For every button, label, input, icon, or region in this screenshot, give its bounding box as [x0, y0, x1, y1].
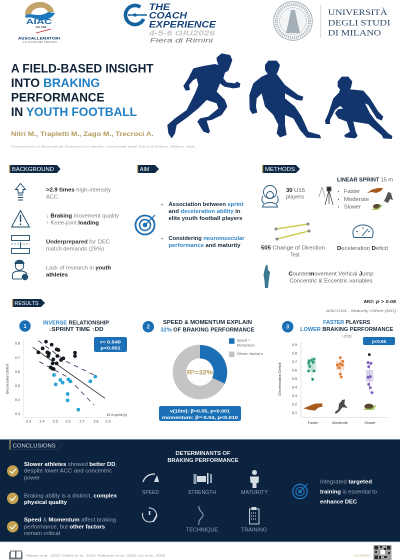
- legend: [229, 338, 263, 357]
- heading 1: [43, 320, 110, 333]
- determinants heading: BRAKING PERFORMANCE: [168, 458, 239, 464]
- y axis ticks: 0.7: [292, 360, 297, 364]
- label: maturity: MATURITY: [241, 490, 268, 496]
- title: INTO BRAKING: [11, 78, 100, 90]
- icon: speed: [143, 474, 159, 482]
- logo: Università degli Studi di Milano: DEGLI STUDI: [328, 17, 390, 27]
- text: 505 test: [261, 246, 325, 259]
- y axis ticks: [292, 343, 297, 415]
- text: ancova: ANCOVA - Maturity Offset (MO): [325, 309, 396, 313]
- icon: strength: [194, 473, 212, 484]
- aim text: [161, 202, 244, 249]
- panel: result 2: [143, 320, 263, 421]
- tag: conclusions: [10, 440, 62, 450]
- contact label: Contact:: [354, 554, 371, 558]
- icon: maturity: [250, 470, 259, 488]
- badge 3: 3: [286, 325, 289, 331]
- badge 2: 2: [147, 325, 150, 331]
- icon: timing gates: [319, 187, 333, 205]
- tag: aim: [137, 165, 159, 173]
- QR code: [374, 545, 392, 560]
- tag: background: [9, 165, 60, 173]
- icon: runner: [335, 399, 348, 414]
- x axis labels: Faster: [308, 421, 319, 425]
- illustration: three football player silhouettes: [167, 53, 392, 139]
- text: maturity offset: MO: p > 0.05: [364, 299, 397, 304]
- logo: The Coach Experience: EXPERIENCE: [149, 20, 217, 30]
- determinants icons: [142, 470, 268, 534]
- text 3: [24, 518, 116, 537]
- y axis ticks: 0.7: [15, 356, 20, 360]
- panel: result 3: [278, 320, 395, 425]
- x axis label: 15 m sprint (s): [107, 413, 127, 417]
- x axis ticks: 2.4: [40, 420, 44, 424]
- title: [11, 64, 154, 119]
- icon: cheetah: [303, 403, 322, 411]
- icon: cheetah: [367, 188, 383, 193]
- tag: results: RESULTS: [14, 301, 39, 307]
- donut chart: R²=32%: [187, 369, 213, 376]
- x axis ticks: 2.9: [106, 420, 110, 424]
- tag: results: [12, 299, 45, 307]
- training takeaway: enhance DEC: [320, 500, 357, 506]
- scatter plot: [23, 340, 110, 417]
- text 1: Slower athletes showed better DD,: [24, 462, 117, 468]
- text: lack of research: athletes: [46, 272, 68, 278]
- y axis ticks: 0.5: [15, 384, 20, 388]
- icon: gap: [11, 236, 30, 254]
- icon: gauge: [353, 225, 373, 238]
- training takeaway: training is essential to: [320, 490, 377, 496]
- text: 30 U15 players: [286, 188, 305, 200]
- references: Harper et al., 2020; Clarke et al., 2022; McBurnie et al., 2022; Lin et al., 2025: [26, 554, 165, 558]
- text 1: [24, 462, 117, 482]
- text: CMJ: Concentric & Eccentric variables: [290, 279, 373, 285]
- icon: players group: [262, 186, 278, 207]
- text 2: physical quality: [24, 500, 68, 506]
- text 1: power: [24, 476, 40, 482]
- icon: target: [293, 484, 308, 499]
- tag: methods: METHODS: [265, 167, 296, 173]
- label: technique: TECHNIQUE: [186, 528, 218, 534]
- icon: runner: [384, 192, 393, 203]
- text: 30 U15 players: 30 U15: [286, 188, 305, 194]
- tag: background: BACKGROUND: [12, 167, 54, 173]
- icon: book: [10, 551, 22, 559]
- aim text: Association between sprint: [168, 202, 244, 208]
- icon: technique feet: [199, 506, 203, 525]
- background list: [11, 184, 119, 280]
- text: braking quality: [46, 214, 119, 226]
- heading 1: INVERSE RELATIONSHIP: [43, 320, 110, 326]
- stats box: r= 0.540: [100, 340, 122, 344]
- logo: AIAC: [18, 2, 60, 44]
- legend: Other factors: [237, 352, 263, 356]
- label: strength: STRENGTH: [188, 490, 216, 496]
- tag: methods: [262, 165, 300, 173]
- text: lack of research: [46, 266, 111, 278]
- p-value box: p<0.05: [372, 339, 386, 344]
- label: speed: SPEED: [142, 490, 159, 496]
- x axis ticks: 2.3: [26, 420, 31, 424]
- icon: turtle: [372, 204, 382, 210]
- x axis ticks: 2.7: [80, 420, 84, 424]
- logo: The Coach Experience: COACH: [149, 10, 187, 20]
- x axis ticks: 2.6: [66, 420, 70, 424]
- text 2: Braking ability is a distinct, complex: [24, 493, 118, 499]
- icon: warning: [12, 210, 30, 227]
- aim text: and deceleration ability in: [168, 209, 240, 215]
- logo: The Coach Experience: 4-5-6 GIU2026: [148, 29, 216, 38]
- text: high intensity: >2.9 times high-intensity: [46, 188, 111, 194]
- text: 30 U15 players: players: [286, 194, 305, 200]
- icon: athlete: [12, 260, 28, 280]
- heading 2: 32% OF BRAKING PERFORMANCE: [160, 327, 255, 333]
- title: IN YOUTH FOOTBALL: [11, 107, 137, 119]
- logo: Università degli Studi di Milano: [274, 2, 390, 40]
- text: underprepared: [46, 240, 110, 252]
- logo: Università degli Studi di Milano: UNIVERSITÀ: [328, 7, 388, 17]
- y axis ticks: 0.1: [292, 411, 297, 415]
- methods content: [261, 178, 397, 313]
- text 1: despite lower ACC and concentric: [24, 469, 112, 475]
- text: deceleration deficit: Deceleration Deficit: [337, 246, 389, 252]
- affiliation: Department of Biomedical Sciences for Health, Università degli Studi di Milano, Milano, Italy: [11, 145, 196, 149]
- text: CMJ: [288, 272, 374, 285]
- heading 3: FASTER PLAYERS: [323, 320, 371, 326]
- legend: Momentum: [237, 344, 255, 348]
- conclusion items: [7, 462, 118, 537]
- y axis label: Deceleration Deficit: [6, 364, 10, 394]
- x axis labels: Moderate: [332, 421, 348, 425]
- determinants heading: [168, 451, 239, 464]
- icon: target: [136, 215, 155, 234]
- logo: AIAC: DAL 1966: [36, 26, 47, 29]
- aim text: performance and maturity: [168, 243, 241, 249]
- logo: The Coach Experience: [122, 2, 217, 44]
- heading 2: SPEED & MOMENTUM EXPLAIN: [163, 320, 252, 326]
- tag: conclusions: CONCLUSIONS: [13, 443, 56, 449]
- stats box: [159, 406, 241, 421]
- sprint groups: Slower: [344, 204, 361, 210]
- logo: Università degli Studi di Milano: DI MILANO: [328, 28, 381, 38]
- title: PERFORMANCE: [11, 92, 105, 104]
- check 1: [7, 465, 18, 477]
- y axis label: Deceleration Deficit: [278, 362, 282, 395]
- text: braking quality: ↑ Knee-joint loading: [46, 220, 99, 226]
- logo: AIAC: ASSOALLENATORI: [18, 36, 60, 40]
- icon: jumper: [264, 265, 270, 288]
- check 3: [7, 521, 18, 532]
- logo: AIAC: · LA CASA DEI TECNICI ·: [21, 41, 59, 44]
- icon: arrow up: [16, 184, 26, 200]
- x axis ticks: [26, 420, 110, 424]
- y axis ticks: [15, 341, 20, 416]
- y axis ticks: 0.4: [15, 398, 20, 402]
- y axis ticks: 0.3: [292, 394, 297, 398]
- training takeaway: Integrated targeted: [320, 480, 372, 486]
- stats box: [94, 337, 127, 352]
- text 3: performance, but other factors: [24, 524, 105, 530]
- authors: Nitri M., Trapletti M., Zago M., Trecroci A.: [11, 131, 154, 138]
- panel: result 1: [6, 320, 127, 424]
- text: 505 test: Test: [290, 253, 300, 259]
- logo: The Coach Experience: THE: [149, 2, 171, 12]
- text: underprepared: Underprepared for DEC: [46, 240, 110, 246]
- y axis ticks: 0.8: [15, 341, 20, 345]
- stats box: p<0.001: [100, 346, 121, 350]
- training takeaway: [320, 480, 377, 506]
- icon: stopwatch runner: [142, 508, 157, 522]
- stats box: momentum: β=-0.04, p<0.010: [162, 415, 239, 420]
- text: braking quality: ↓ Braking movement quality: [46, 214, 119, 220]
- aim text: elite youth football players: [168, 216, 243, 222]
- strip plot: [301, 343, 388, 417]
- determinants heading: DETERMINANTS OF: [176, 451, 230, 457]
- check 2: [7, 493, 18, 504]
- text 2: [24, 493, 118, 506]
- x axis ticks: 2.8: [94, 420, 98, 424]
- aim text: Considering neuromuscular: [168, 236, 244, 242]
- y axis ticks: 0.6: [292, 369, 297, 373]
- text: 505 test: 505 Change of Direction: [261, 246, 325, 252]
- text 3: remain critical: [24, 531, 60, 537]
- x axis labels: Slower: [364, 421, 376, 425]
- stats box: v(15m): β=0.55, p<0.001: [170, 408, 231, 414]
- icon: training: [250, 508, 259, 524]
- heading 2: [160, 320, 255, 333]
- text: lack of research: Lack of research in youth: [46, 266, 111, 272]
- logo: The Coach Experience: Fiera di Rimini: [150, 38, 214, 44]
- text 3: Speed & Momentum affect braking: [24, 518, 116, 524]
- y axis ticks: 0.9: [292, 343, 297, 347]
- text: underprepared: match demands (26%): [46, 246, 104, 252]
- sprint groups: [338, 189, 369, 210]
- text: high intensity: [46, 188, 111, 200]
- logo: AIAC: AIAC: [26, 17, 53, 26]
- y axis ticks: 0.3: [15, 412, 20, 416]
- heading 1: ↓SPRINT TIME ↑DD: [48, 327, 104, 333]
- x axis ticks: 2.5: [53, 420, 58, 424]
- text: CMJ: Counter movement Vertical Jump: [288, 272, 374, 278]
- y axis ticks: 0.8: [292, 352, 297, 356]
- y axis ticks: 0.2: [292, 402, 297, 406]
- icon: 505 cones track: [274, 222, 310, 240]
- sprint groups: Faster: [344, 189, 360, 195]
- label: training: TRAINING: [241, 528, 267, 534]
- sprint groups: Moderate: [344, 197, 369, 203]
- x axis labels: [308, 421, 376, 425]
- note: ↑COD: [342, 334, 352, 338]
- heading 3: LOWER BRAKING PERFORMANCE: [300, 327, 394, 333]
- title: A FIELD-BASED INSIGHT: [11, 64, 154, 76]
- heading 3: [300, 320, 394, 333]
- tag: aim: AIM: [140, 167, 149, 173]
- y axis ticks: 0.6: [15, 370, 20, 374]
- text: linear sprint: LINEAR SPRINT 15 m: [337, 178, 393, 184]
- text: high intensity: ACC: [46, 194, 58, 200]
- y axis ticks: 0.5: [292, 377, 297, 381]
- panel: conclusions: [0, 439, 400, 542]
- y axis ticks: 0.4: [292, 386, 297, 390]
- legend: Speed +: [237, 339, 250, 343]
- icon: turtle: [364, 404, 376, 409]
- badge 1: 1: [24, 324, 27, 330]
